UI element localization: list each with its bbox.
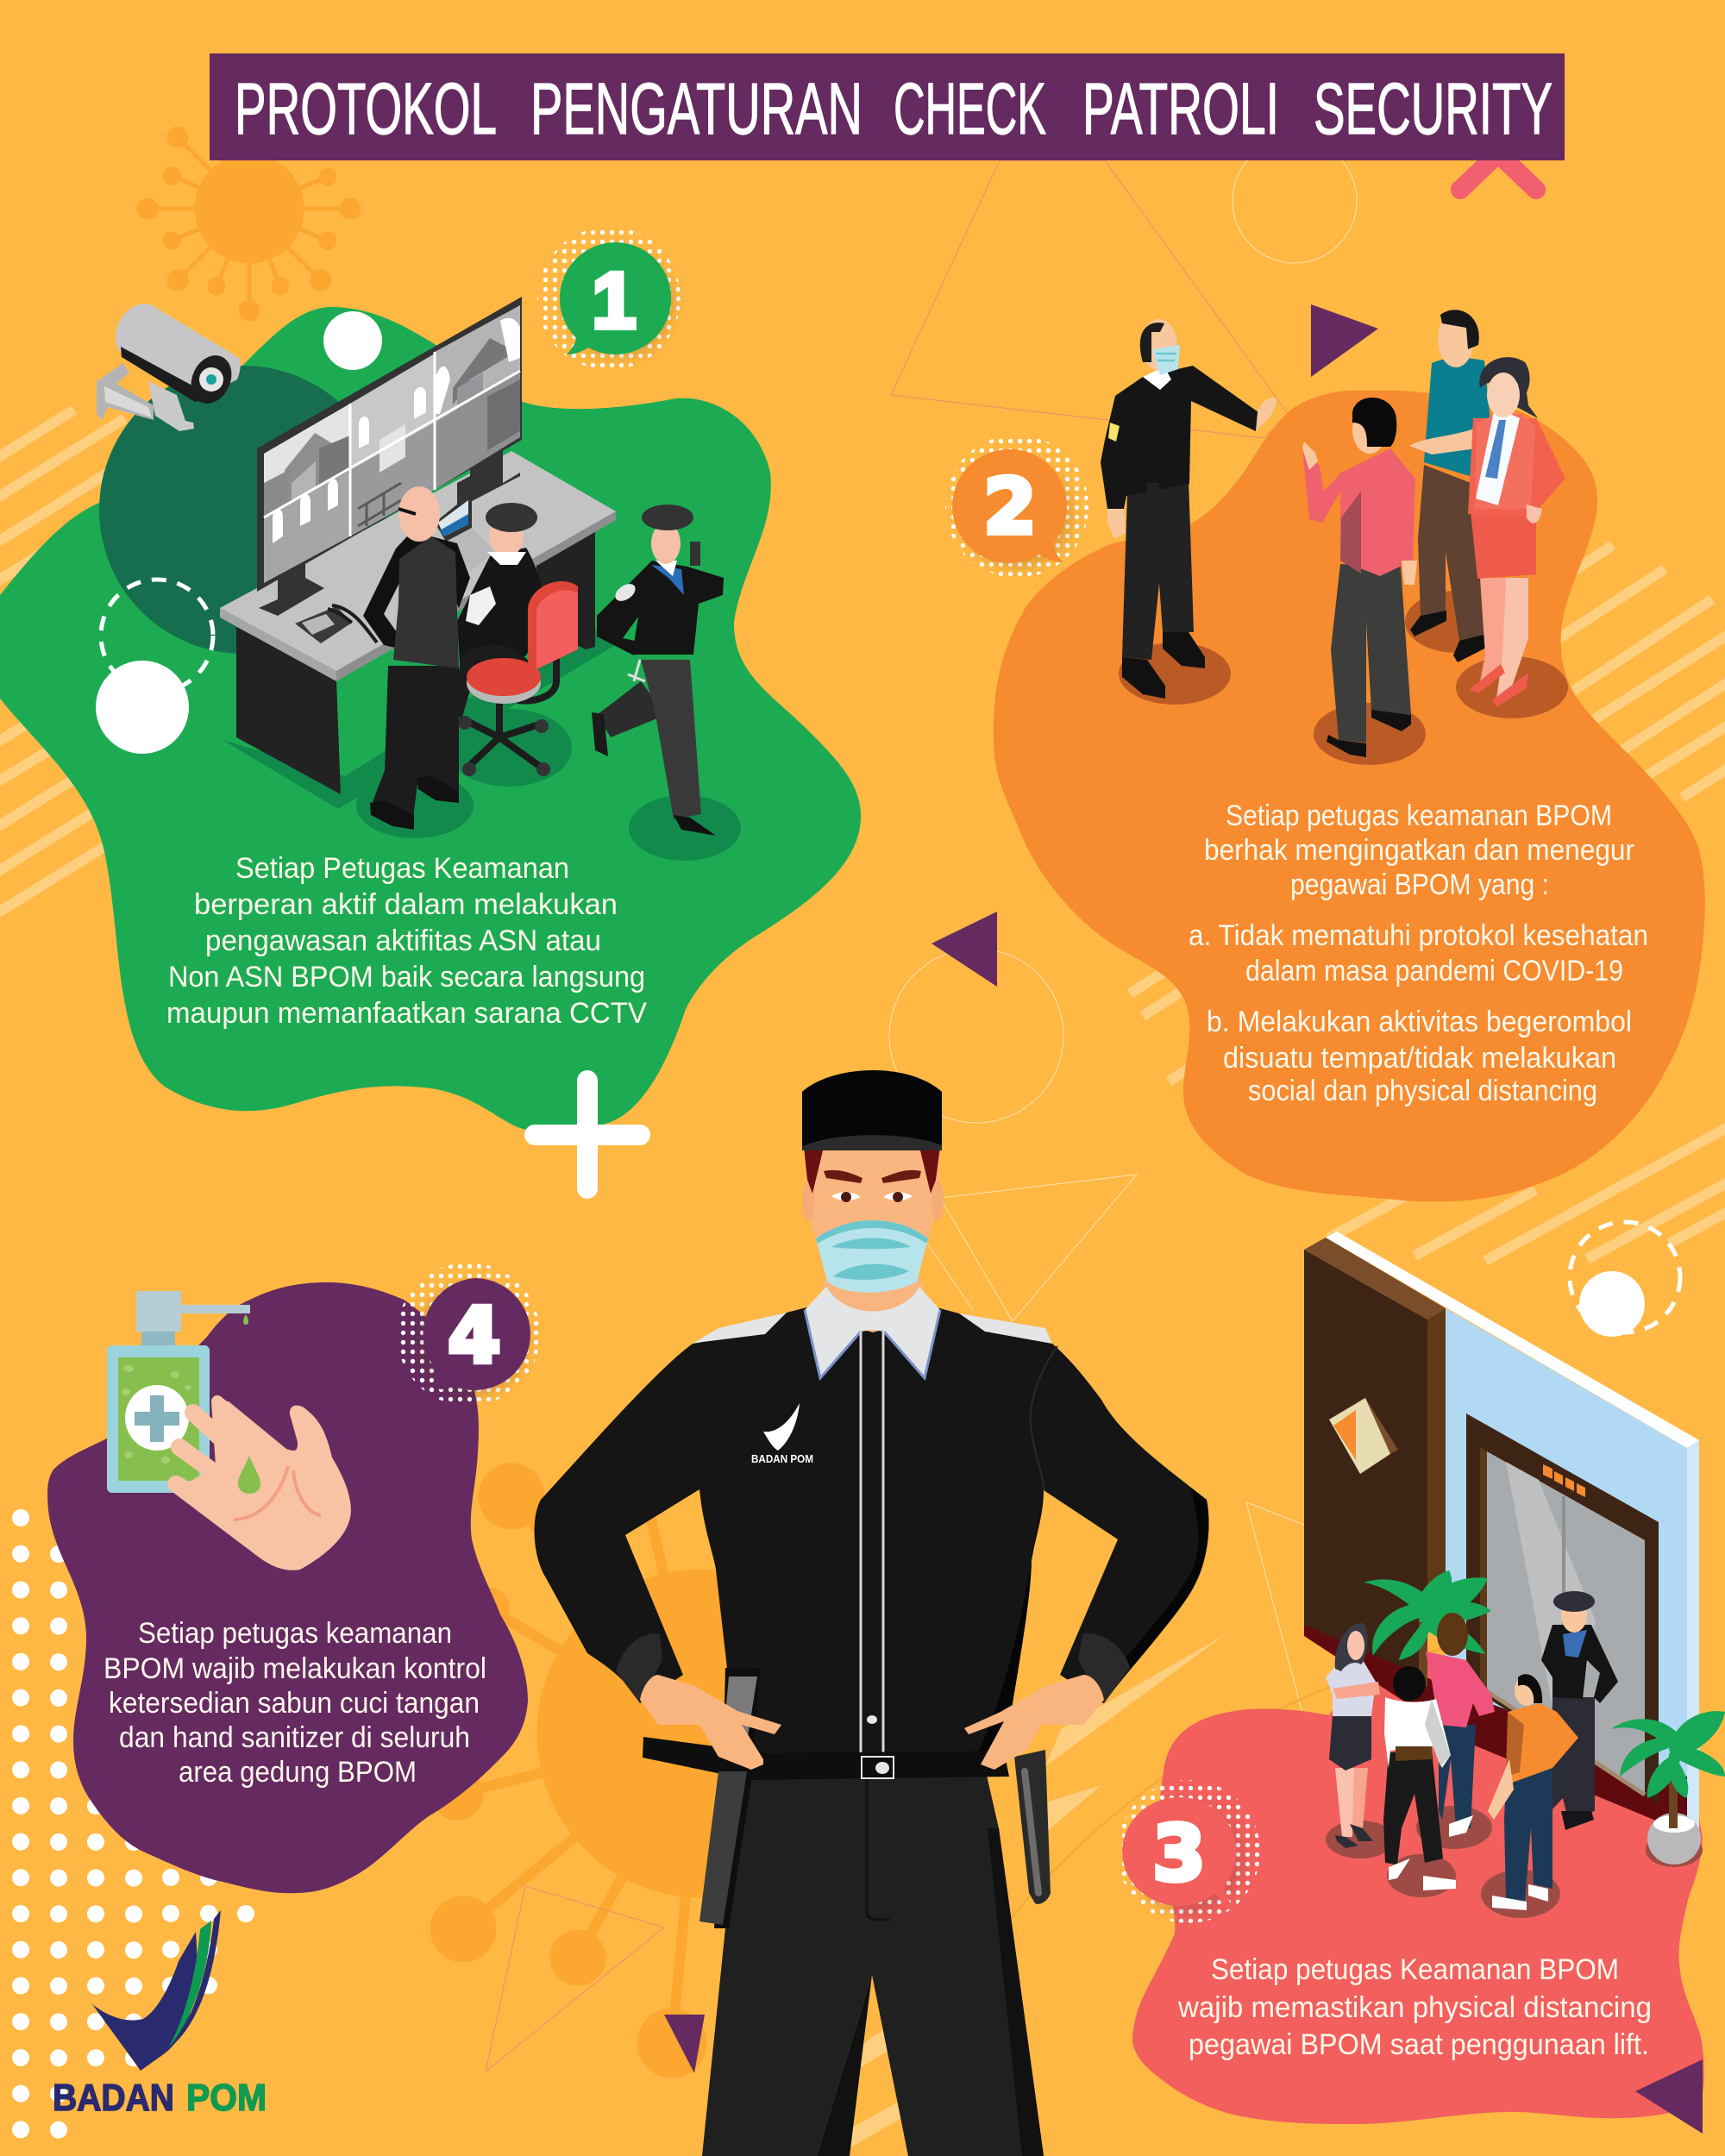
panel 1 text: maupun memanfaatkan sarana CCTV bbox=[166, 997, 647, 1030]
logo: Badan POM bbox=[53, 1910, 267, 2119]
chair bbox=[446, 625, 572, 787]
shirt placket bbox=[861, 1332, 883, 1757]
title text: SECURITY bbox=[1314, 68, 1552, 149]
panel 2 text: pegawai BPOM yang : bbox=[1290, 868, 1549, 901]
phone bbox=[295, 605, 377, 643]
decorative virus top bbox=[137, 127, 361, 321]
dashed ring bbox=[101, 580, 213, 692]
woman with black leggings bbox=[1383, 1666, 1456, 1890]
holster bbox=[1014, 1750, 1051, 1904]
icon: purple triangle middle bbox=[932, 912, 997, 987]
panel 3 blob bbox=[1132, 1639, 1704, 2124]
shoulder strips bbox=[693, 1313, 787, 1344]
panel 2 text: berhak mengingatkan dan menegur bbox=[1204, 834, 1634, 867]
badge 3 bbox=[1117, 1780, 1260, 1923]
desk floor shadow bbox=[223, 625, 618, 809]
icon: pink chevron bbox=[1460, 154, 1536, 190]
teal shirt man bbox=[1405, 310, 1509, 662]
panel 1 blob bbox=[0, 307, 861, 1132]
panel 4: hand sanitizer bbox=[47, 1263, 540, 1893]
plant and pot right bbox=[1611, 1711, 1725, 1867]
head bbox=[802, 1147, 944, 1276]
running guard bbox=[592, 505, 741, 861]
panel 3 text: Setiap petugas Keamanan BPOM bbox=[1211, 1953, 1619, 1986]
title text bbox=[235, 68, 1552, 149]
man in pink bbox=[1302, 398, 1426, 765]
panel 4 blob bbox=[47, 1282, 528, 1893]
seated officer bbox=[453, 503, 548, 720]
white circle top bbox=[323, 311, 382, 370]
panel 1 text: Setiap Petugas Keamanan bbox=[235, 852, 569, 885]
woman with white blouse bbox=[1326, 1623, 1380, 1848]
panel 4 text: area gedung BPOM bbox=[179, 1756, 417, 1789]
white circle right bbox=[1579, 1271, 1645, 1337]
left hand bbox=[640, 1675, 781, 1770]
icon: sanitizer bottle bbox=[107, 1291, 250, 1493]
panel 3: lift physical distancing bbox=[1117, 1222, 1725, 2134]
floor shadows bbox=[1326, 1806, 1560, 1918]
badge 4: 4 bbox=[448, 1291, 501, 1380]
icon: hand with sanitizer drop bbox=[172, 1401, 351, 1570]
woman in red bbox=[1456, 357, 1568, 718]
neck bbox=[814, 1276, 932, 1332]
panel 1: CCTV monitoring bbox=[0, 227, 861, 1188]
icon: purple triangle corner bbox=[1635, 2059, 1703, 2134]
panel 4 text: Setiap petugas keamanan bbox=[138, 1617, 452, 1650]
panel 4 text bbox=[104, 1617, 486, 1789]
wall sign bbox=[1329, 1398, 1398, 1474]
monitor wall bbox=[257, 297, 522, 616]
face mask bbox=[816, 1220, 928, 1293]
icon: purple triangle top bbox=[1311, 304, 1378, 377]
panel 1 dark circle bbox=[99, 366, 387, 654]
panel 2 blob bbox=[994, 391, 1705, 1201]
main security guard bbox=[535, 1070, 1208, 2156]
white circle left bbox=[96, 661, 189, 754]
panel 2 text: a. Tidak mematuhi protokol kesehatan bbox=[1189, 919, 1648, 952]
man in orange bbox=[1488, 1674, 1578, 1910]
dashed ring right bbox=[1570, 1222, 1680, 1332]
badge 1: 1 bbox=[592, 257, 637, 345]
right hand bbox=[964, 1675, 1104, 1770]
shirt and arms bbox=[535, 1294, 1208, 1759]
panel 4 text: dan hand sanitizer di seluruh bbox=[119, 1721, 470, 1754]
panel 3 text bbox=[1177, 1953, 1652, 2061]
panel 2 text: Setiap petugas keamanan BPOM bbox=[1226, 799, 1612, 832]
plus icon bbox=[535, 1081, 640, 1188]
icon: CCTV camera bbox=[97, 304, 241, 431]
title text: PATROLI bbox=[1082, 68, 1279, 149]
plant left bbox=[1364, 1570, 1491, 1686]
badge 2 bbox=[945, 435, 1088, 578]
badge 1 bbox=[537, 227, 681, 370]
decorative virus bottom bbox=[430, 1463, 865, 2078]
title banner bbox=[210, 53, 1565, 160]
panel 4 text: BPOM wajib melakukan kontrol bbox=[104, 1652, 486, 1685]
collar bbox=[805, 1287, 940, 1378]
chest logo bbox=[751, 1403, 813, 1465]
chest logo: BADAN POM bbox=[751, 1452, 813, 1465]
panel 3 text: pegawai BPOM saat penggunaan lift. bbox=[1189, 2028, 1649, 2061]
panel 2 text: dalam masa pandemi COVID-19 bbox=[1245, 955, 1623, 987]
panel 2 text bbox=[1189, 799, 1648, 1107]
title text: PROTOKOL bbox=[235, 68, 497, 149]
logo text: POM bbox=[186, 2077, 267, 2119]
baton bbox=[699, 1668, 760, 1928]
logo mark bbox=[92, 1910, 221, 2071]
logo text: BADAN bbox=[53, 2077, 174, 2119]
dot pattern bottom left bbox=[21, 1518, 246, 2139]
panel 4 text: ketersedian sabun cuci tangan bbox=[109, 1687, 480, 1720]
panel 2 text: disuatu tempat/tidak melakukan bbox=[1223, 1042, 1616, 1075]
belt bbox=[643, 1737, 1009, 1780]
elevator wall bbox=[1304, 1232, 1699, 1837]
panel 1 text: berperan aktif dalam melakukan bbox=[194, 888, 618, 921]
cap bbox=[802, 1070, 942, 1150]
title text: PENGATURAN bbox=[530, 68, 862, 149]
cuffs bbox=[616, 1633, 662, 1703]
lift guard bbox=[1541, 1591, 1618, 1830]
panel 1 text: pengawasan aktifitas ASN atau bbox=[205, 924, 601, 957]
badge 3: 3 bbox=[1152, 1809, 1206, 1898]
badge 2: 2 bbox=[983, 462, 1037, 551]
panel 2: reminding staff bbox=[945, 310, 1705, 1201]
woman with brown hair bbox=[1426, 1613, 1495, 1837]
desk bbox=[220, 451, 616, 794]
panel 3 text: wajib memastikan physical distancing bbox=[1177, 1991, 1652, 2024]
panel 1 text: Non ASN BPOM baik secara langsung bbox=[168, 961, 645, 993]
chair seat bbox=[467, 581, 578, 704]
title text: CHECK bbox=[894, 68, 1046, 149]
panel 2 text: social dan physical distancing bbox=[1248, 1075, 1597, 1107]
badge 4 bbox=[397, 1263, 540, 1406]
logo text bbox=[53, 2077, 267, 2119]
panel 1 text bbox=[166, 852, 647, 1030]
bald supervisor bbox=[356, 486, 474, 838]
guard with mask bbox=[1101, 319, 1276, 705]
laptop bbox=[435, 492, 496, 571]
icon: purple triangle bottom bbox=[664, 2015, 705, 2073]
panel 2 text: b. Melakukan aktivitas begerombol bbox=[1207, 1006, 1632, 1038]
trousers bbox=[702, 1768, 1044, 2156]
